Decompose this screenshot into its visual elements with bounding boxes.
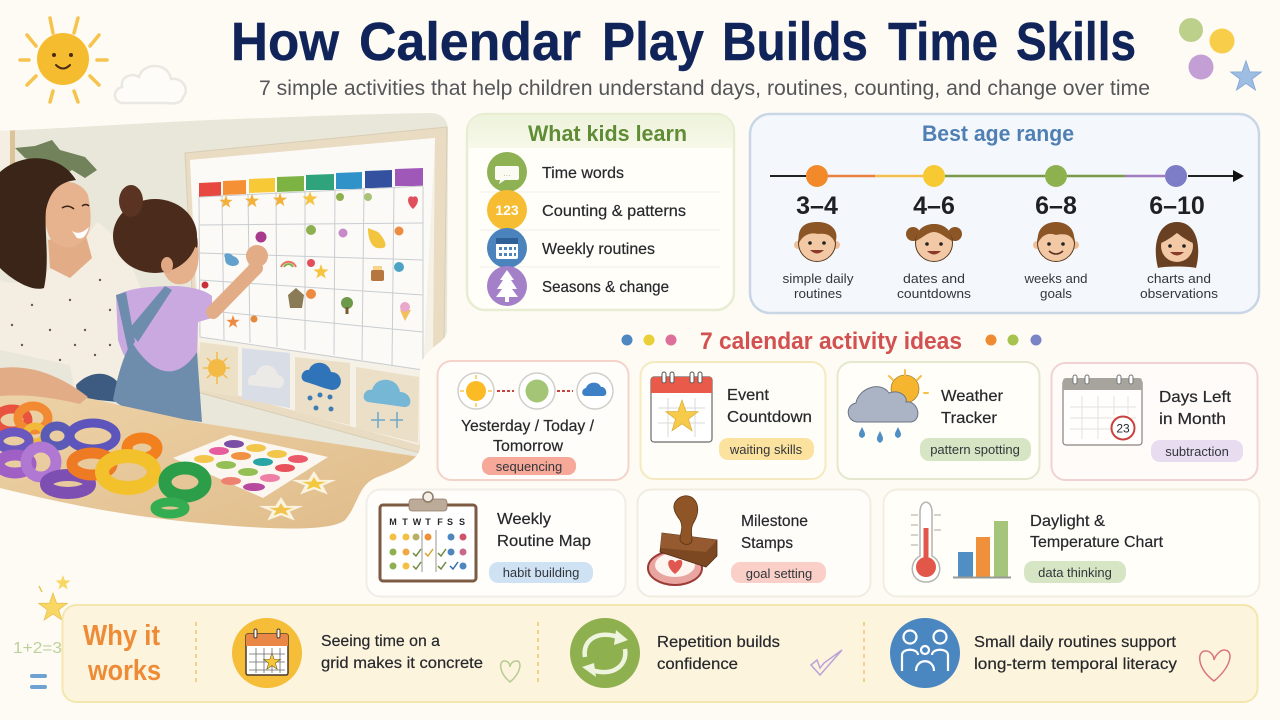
woman <box>0 158 142 402</box>
panel: best age range <box>750 114 1259 313</box>
age group: 6-8: 6–8 <box>1035 192 1077 220</box>
title: Calendar <box>359 12 581 72</box>
reason: seeing time on a grid <box>232 618 520 688</box>
tag: sequencing: sequencing <box>496 459 562 474</box>
photo: parent and child at wall calendar <box>0 110 450 540</box>
card: weekly routine map <box>366 490 626 596</box>
subtitle: 7 simple activities that help children understand days, routines, counting, and change over time <box>259 76 1150 100</box>
row: seasons and change: Seasons & change <box>542 279 669 296</box>
age group: 4-6: countdowns <box>897 286 972 301</box>
weather tiles <box>197 342 419 443</box>
age group: 6-8 <box>1023 192 1088 301</box>
reason: repetition builds confidence <box>570 618 842 688</box>
row: seasons and change <box>487 266 669 306</box>
card: days left in month <box>1052 363 1258 480</box>
icon: clipboard chart: T <box>402 517 408 527</box>
card: days left in month: Days Left <box>1159 389 1232 406</box>
reason: repetition builds confidence: confidence <box>657 656 738 673</box>
card: daylight and temperature chart: Daylight & <box>1030 513 1105 530</box>
heading: Why it <box>83 620 160 652</box>
icon: calendar with circled date: 23 <box>1116 422 1130 436</box>
title: Skills <box>1016 12 1136 72</box>
reason: small daily routines: long-term temporal literacy <box>974 656 1177 673</box>
icon: clipboard chart: S <box>447 517 453 527</box>
card: yesterday today tomorrow: Yesterday / Today / <box>461 418 595 435</box>
card: event countdown: Countdown <box>727 409 812 426</box>
age group: 3-4: 3–4 <box>796 192 838 220</box>
reason: small daily routines: Small daily routines support <box>974 634 1177 651</box>
age group: 6-10: observations <box>1140 286 1219 301</box>
sticker sheet <box>173 435 331 518</box>
age group: 4-6 <box>897 192 972 301</box>
icon: clipboard chart: M <box>389 517 397 527</box>
age group: 4-6: 4–6 <box>913 192 955 220</box>
card: days left in month: in Month <box>1159 411 1226 428</box>
doodle: stars and sum: 1+2=3 <box>13 640 62 657</box>
icon: clipboard chart: T <box>425 517 431 527</box>
card: daylight and temperature chart: Temperature Chart <box>1030 534 1164 551</box>
title: Time <box>888 12 998 72</box>
heading: 7 calendar activity ideas <box>622 328 1042 355</box>
age group: 6-8: weeks and <box>1023 271 1088 286</box>
child <box>113 185 268 422</box>
plant <box>15 140 97 178</box>
icon: thermometer <box>911 502 941 582</box>
card: weather tracker: Tracker <box>941 410 998 427</box>
row: time words <box>487 152 624 192</box>
icon: three day circles <box>458 373 613 409</box>
icon: wooden stamp with heart <box>648 496 717 585</box>
card: milestone stamps: Stamps <box>741 535 793 552</box>
calendar board <box>185 127 447 453</box>
card: daylight and temperature chart <box>884 490 1260 596</box>
row: counting and patterns <box>487 190 686 230</box>
card: milestone stamps <box>638 490 870 596</box>
woman's arm on table <box>0 367 88 404</box>
title: Play <box>602 12 704 72</box>
icon: clipboard chart: S <box>459 517 465 527</box>
tag: subtraction: subtraction <box>1165 444 1229 459</box>
tag: waiting skills: waiting skills <box>729 442 803 457</box>
icon: calendar with star <box>651 372 712 442</box>
card: weekly routine map: Routine Map <box>497 533 591 550</box>
age group: 6-8: goals <box>1040 286 1073 301</box>
card: event countdown <box>640 362 826 479</box>
tag: pattern spotting: pattern spotting <box>930 442 1020 457</box>
tag: data thinking <box>1024 561 1126 583</box>
panel: what kids learn <box>467 114 734 310</box>
row: weekly routines <box>487 228 655 268</box>
stickers <box>219 195 233 208</box>
age group: 3-4 <box>782 192 854 301</box>
heading: Best age range <box>922 121 1074 146</box>
header colours <box>199 182 221 197</box>
age group: 6-10: 6–10 <box>1149 192 1205 220</box>
title <box>231 12 1136 72</box>
reason: small daily routines <box>890 618 1230 688</box>
table <box>0 395 416 528</box>
icon: pale cloud <box>115 66 186 103</box>
icon: smiling sun <box>20 18 107 102</box>
icon: clipboard chart: F <box>437 517 443 527</box>
tag: subtraction <box>1151 440 1243 462</box>
tag: goal setting: goal setting <box>746 566 812 581</box>
tag: habit building: habit building <box>503 565 579 580</box>
title: Builds <box>722 12 868 72</box>
tag: waiting skills <box>719 438 814 460</box>
doodle: stars and sum <box>13 575 71 689</box>
bar chart <box>953 521 1011 578</box>
icon: clipboard chart <box>380 492 476 581</box>
card: weather tracker <box>838 362 1040 479</box>
row: time words: ... <box>503 168 511 178</box>
paper chain <box>0 406 205 514</box>
icon: sun cloud and rain <box>848 370 928 443</box>
tag: pattern spotting <box>920 438 1031 461</box>
card: event countdown: Event <box>727 387 770 404</box>
title: How <box>231 12 340 72</box>
card: weather tracker: Weather <box>941 388 1004 405</box>
age group: 6-10 <box>1140 192 1219 301</box>
tag: goal setting <box>731 562 826 583</box>
row: weekly routines: Weekly routines <box>542 241 655 258</box>
icon: clipboard chart: W <box>413 517 422 527</box>
heading: 7 calendar activity ideas: 7 calendar activity ideas <box>700 328 962 355</box>
grid <box>199 186 423 370</box>
tag: habit building <box>489 562 593 583</box>
reason: repetition builds confidence: Repetition builds <box>657 634 780 651</box>
age group: 6-10: charts and <box>1147 271 1211 286</box>
timeline <box>770 165 1244 187</box>
reason: seeing time on a grid: grid makes it concrete <box>321 655 483 672</box>
card: weekly routine map: Weekly <box>497 511 551 528</box>
card: yesterday today tomorrow: Tomorrow <box>493 438 563 455</box>
row: time words: Time words <box>542 165 624 182</box>
panel: why it works: works <box>87 655 161 687</box>
panel: why it works <box>62 605 1258 702</box>
row: counting and patterns: 123 <box>495 202 519 218</box>
age group: 4-6: dates and <box>903 271 965 286</box>
age group: 3-4: simple daily <box>782 271 854 286</box>
card: yesterday today tomorrow <box>438 361 628 480</box>
icon: calendar with circled date <box>1063 375 1142 445</box>
wall <box>0 113 448 456</box>
age group: 3-4: routines <box>794 286 843 301</box>
reason: seeing time on a grid: Seeing time on a <box>321 633 440 650</box>
tag: sequencing <box>482 457 576 475</box>
decorative dots and star top right <box>1179 18 1261 90</box>
card: milestone stamps: Milestone <box>741 513 808 530</box>
row: counting and patterns: Counting & patterns <box>542 203 686 220</box>
heading: What kids learn <box>528 121 687 146</box>
tag: data thinking: data thinking <box>1038 565 1112 580</box>
